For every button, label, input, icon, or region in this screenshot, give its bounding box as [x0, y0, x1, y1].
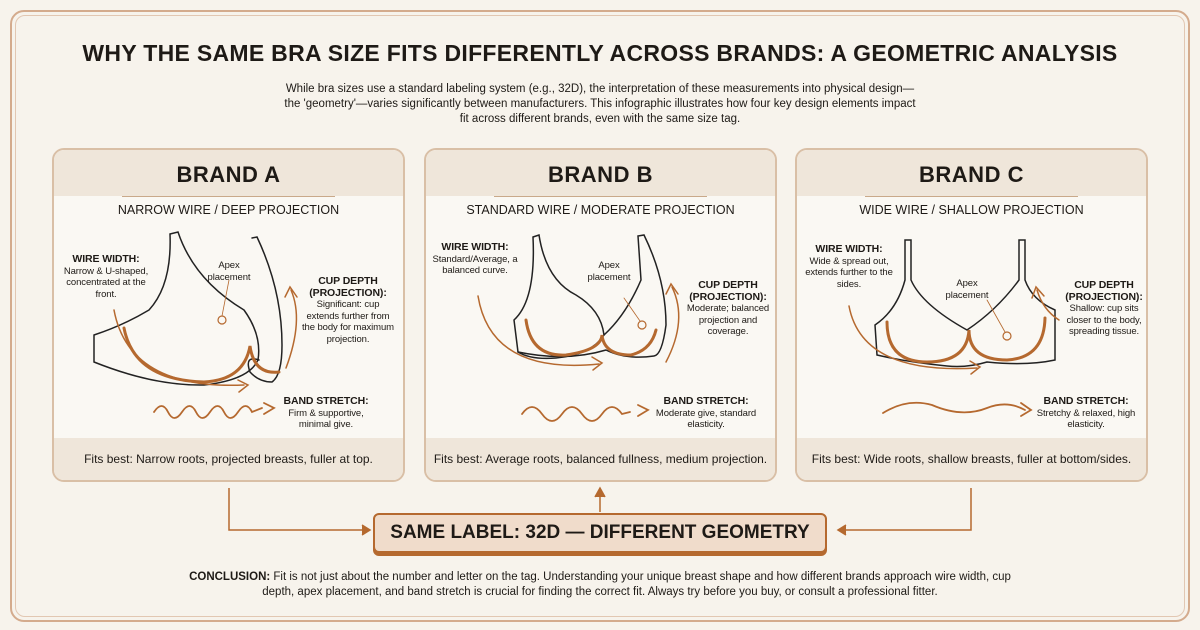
apex label: Apex placement — [946, 278, 988, 300]
band stretch label — [656, 395, 756, 430]
bra C drawing — [848, 239, 1060, 417]
panel: brand B: BRAND B — [548, 162, 653, 187]
band stretch label: Stretchy & relaxed, high elasticity. — [1037, 408, 1135, 430]
intro text: While bra sizes use a standard labeling system (e.g., 32D), the interpretation of these measurements into physical design—the 'geometry'—varies significantly between manufacturers. This infographic illustrates how four key design elements impact fit across different brands, even with the same size tag. — [284, 83, 916, 125]
panel: brand B — [424, 148, 777, 482]
wire width label: Wide & spread out, extends further to the sides. — [805, 256, 893, 290]
band stretch label — [283, 395, 369, 430]
band stretch label: BAND STRETCH: — [283, 395, 369, 407]
band stretch label: BAND STRETCH: — [663, 395, 749, 407]
same label banner — [373, 513, 827, 553]
wire width label — [432, 241, 518, 276]
cup depth label: CUP DEPTH (PROJECTION): — [309, 275, 387, 298]
cup depth label — [302, 275, 394, 344]
panel: brand A: Fits best: Narrow roots, projected breasts, fuller at top. — [84, 452, 373, 466]
cup depth label — [687, 279, 769, 337]
band stretch label: Firm & supportive, — [288, 408, 364, 418]
bra B drawing — [477, 234, 680, 422]
apex label: Apex placement — [588, 260, 630, 282]
panel: brand C: Fits best: Wide roots, shallow breasts, fuller at bottom/sides. — [812, 452, 1131, 466]
cup depth label: Significant: cup extends further from the body for maximum projection. — [302, 299, 394, 344]
panel: brand C — [795, 148, 1148, 482]
panel: brand A: BRAND A — [176, 162, 281, 187]
cup depth label: Shallow: cup sits closer to the body, spreading tissue. — [1066, 303, 1142, 337]
panel: brand B: Fits best: Average roots, balanced fullness, medium projection. — [434, 452, 767, 466]
conclusion: CONCLUSION: Fit is not just about the number and letter on the tag. Understanding your unique breast shape and how different brands approach wire width, cup depth, apex placement, and band stretch is crucial for finding the correct fit. Always try before you buy, or consult a professional fitter. — [189, 571, 1011, 598]
wire width label: Narrow & U-shaped, concentrated at the front. — [64, 266, 148, 300]
same label banner: SAME LABEL: 32D — DIFFERENT GEOMETRY — [390, 522, 810, 543]
wire width label: WIRE WIDTH: — [815, 243, 883, 255]
band stretch label: Moderate give, standard elasticity. — [656, 408, 756, 430]
wire width label: Standard/Average, a balanced curve. — [432, 254, 518, 276]
panel: brand A: NARROW WIRE / DEEP PROJECTION — [118, 203, 339, 217]
panel: brand C: WIDE WIRE / SHALLOW PROJECTION — [859, 203, 1084, 217]
apex label: Apex placement — [208, 260, 250, 282]
cup depth label: CUP DEPTH (PROJECTION): — [1065, 279, 1143, 302]
band stretch label — [1037, 395, 1135, 430]
bra A drawing — [93, 231, 298, 419]
title: WHY THE SAME BRA SIZE FITS DIFFERENTLY ACROSS BRANDS: A GEOMETRIC ANALYSIS — [82, 40, 1118, 66]
cup depth label — [1065, 279, 1143, 337]
panel: brand A — [52, 148, 405, 482]
cup depth label: Moderate; balanced projection and coverage. — [687, 303, 769, 337]
band stretch label: minimal give. — [299, 419, 353, 430]
wire width label: WIRE WIDTH: — [441, 241, 509, 253]
panel: brand C: BRAND C — [919, 162, 1024, 187]
panel: brand B: STANDARD WIRE / MODERATE PROJECTION — [466, 203, 735, 217]
band stretch label: BAND STRETCH: — [1043, 395, 1129, 407]
wire width label: WIRE WIDTH: — [72, 253, 140, 265]
cup depth label: CUP DEPTH (PROJECTION): — [689, 279, 767, 302]
